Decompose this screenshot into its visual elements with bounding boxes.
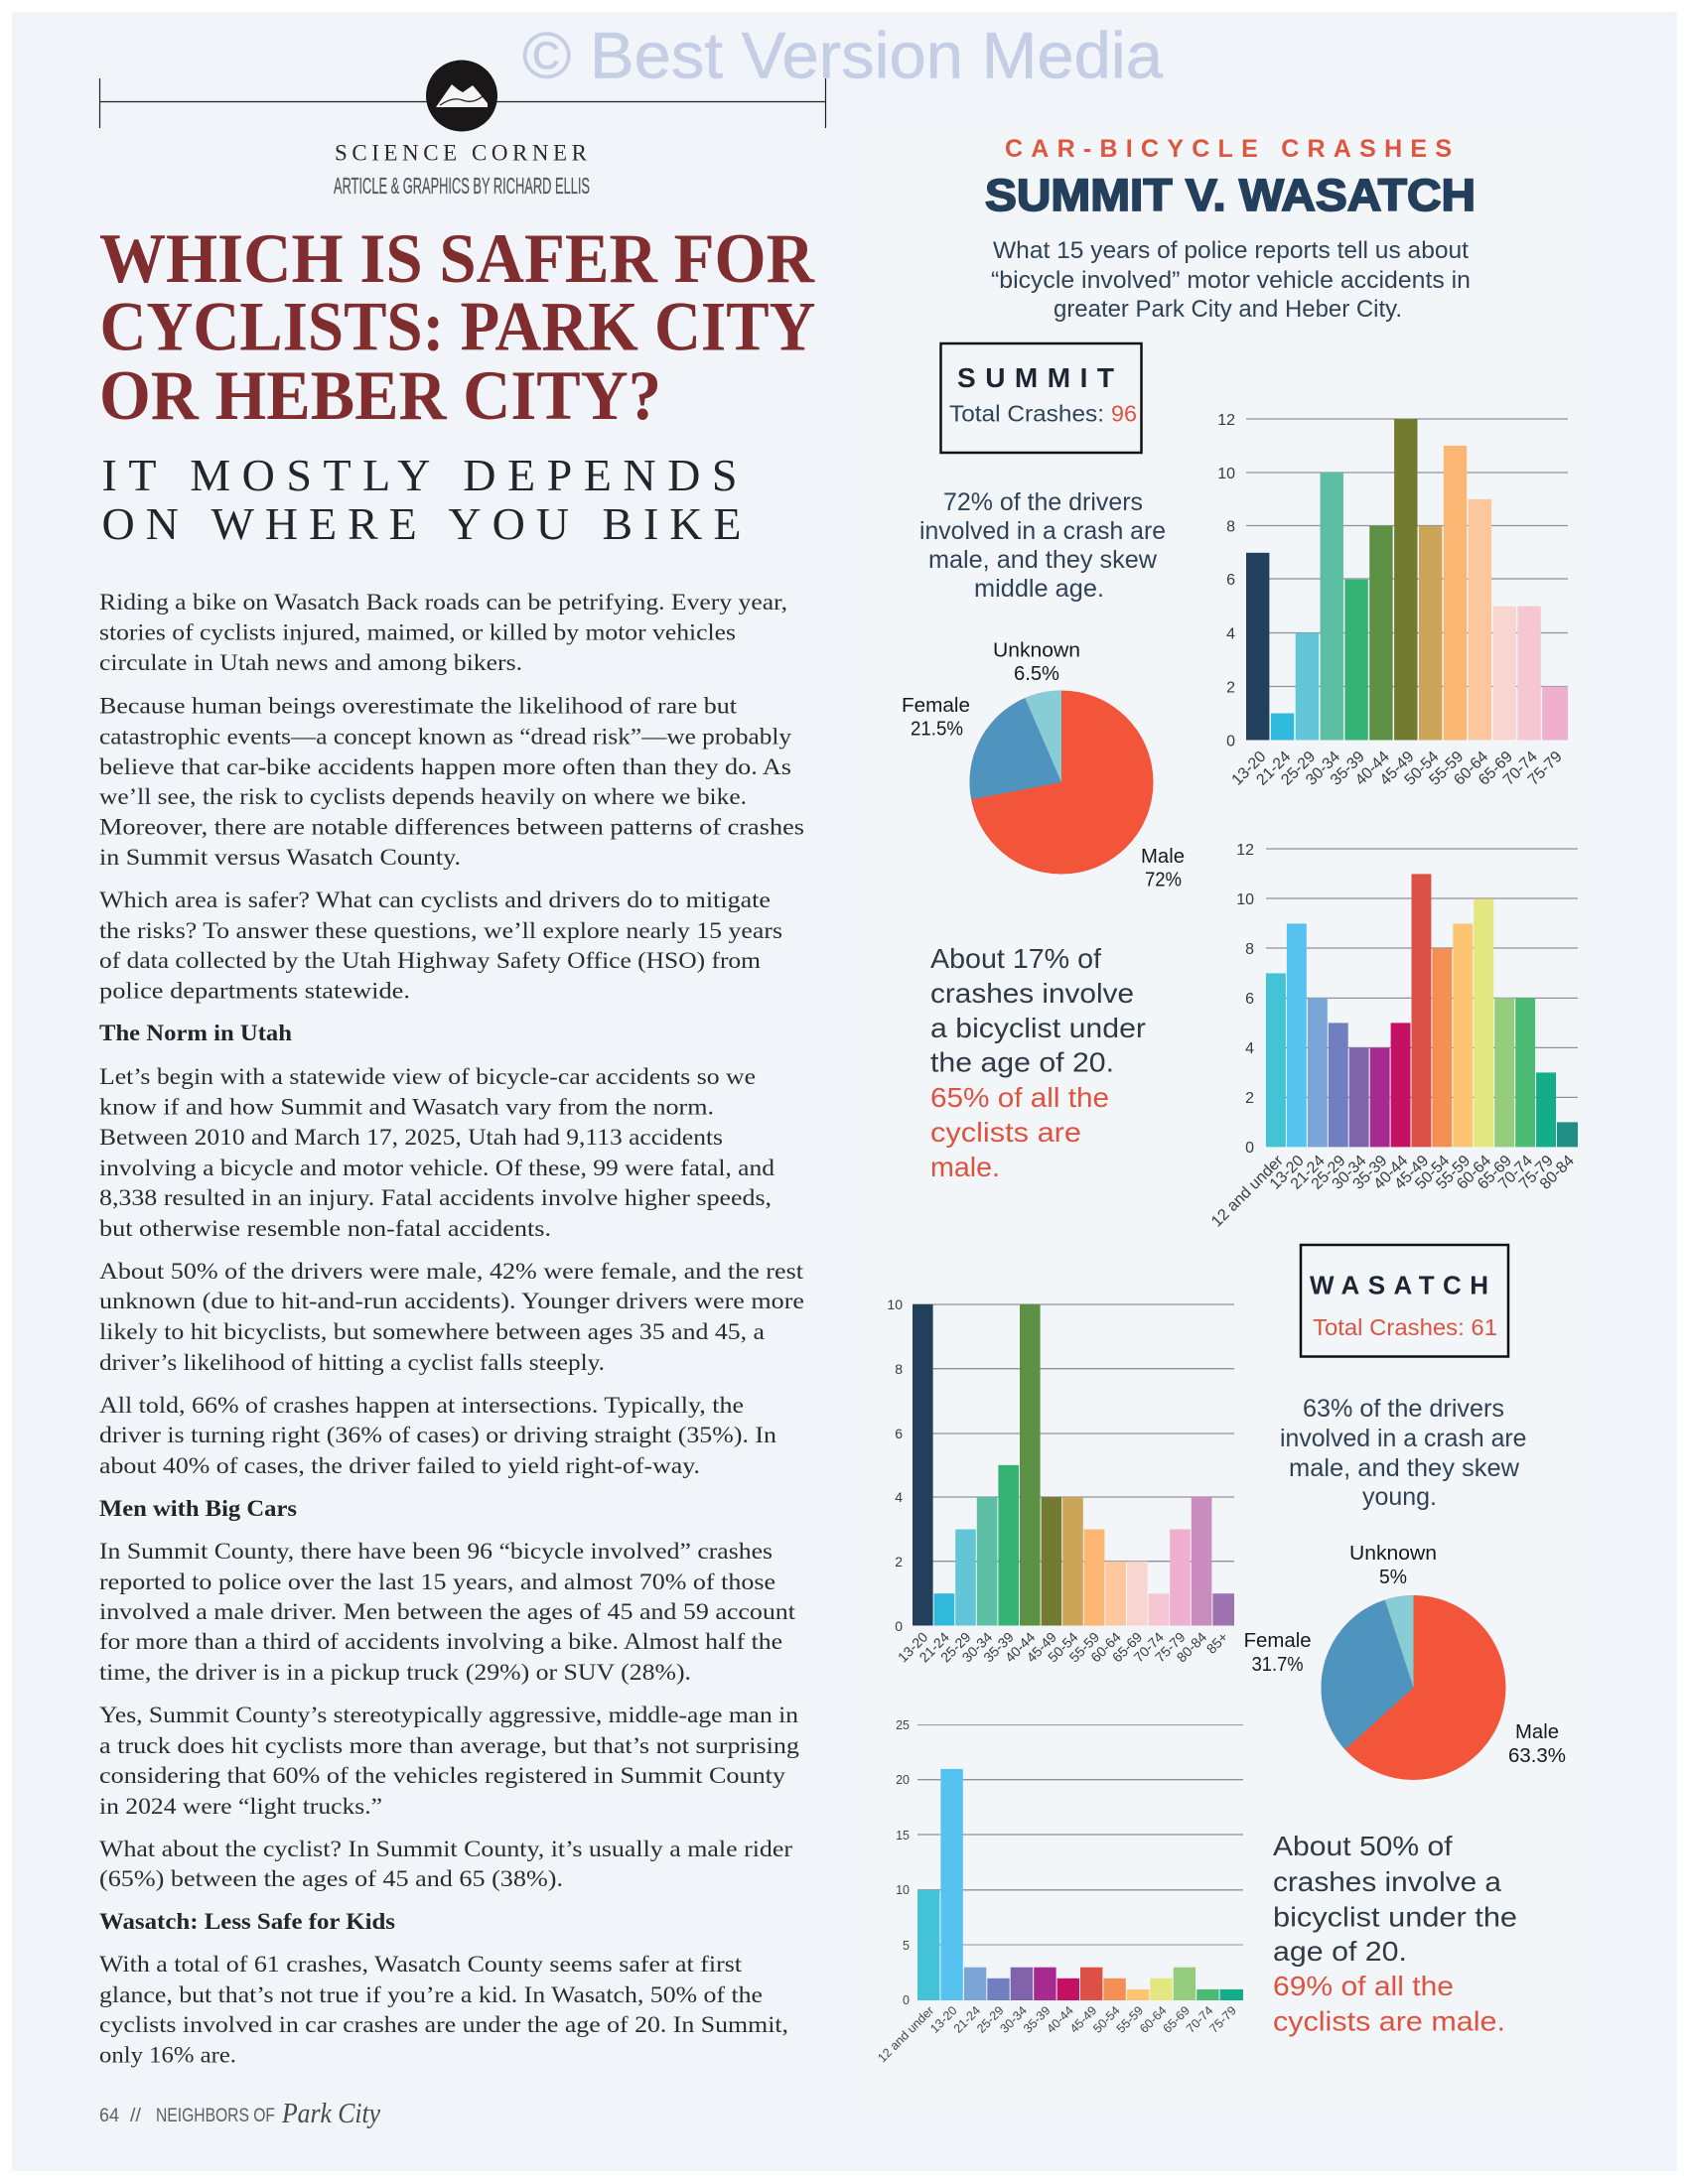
bar chart: summit drivers by age: 35-39 — [1328, 749, 1368, 789]
bar chart: wasatch cyclists by age: 35-39 — [1021, 2003, 1054, 2036]
article paragraph 7: In Summit County, there have been 96 “bicycle involved” crashes — [99, 1539, 773, 1564]
summit cyclist callout: About 17% of — [930, 943, 1101, 974]
bar chart: summit cyclists by age: 80-84 — [1537, 1153, 1578, 1193]
wasatch cyclist callout: bicyclist under the — [1273, 1902, 1517, 1932]
bar chart: summit drivers by age: 21-24 — [1253, 749, 1295, 789]
bar chart: summit cyclists by age: 8 — [1245, 941, 1254, 958]
summit driver text — [919, 488, 1166, 603]
infographic intro: “bicycle involved” motor vehicle accidents in — [991, 267, 1471, 294]
article paragraph 3: the risks? To answer these questions, we’ll explore nearly 15 years — [99, 918, 782, 943]
bar chart: wasatch cyclists by age: 12 and under — [875, 2003, 936, 2065]
heading: the norm in Utah: The Norm in Utah — [99, 1021, 292, 1045]
article paragraph 8: a truck does hit cyclists more than average, but that’s not surprising — [99, 1733, 800, 1758]
title: CYCLISTS: PARK CITY — [99, 288, 816, 365]
summit total box — [941, 343, 1142, 453]
article paragraph 9 — [99, 1837, 792, 1891]
bar chart: summit cyclists by age: 21-24 — [1288, 1153, 1329, 1193]
bar chart: wasatch drivers by age: 45-49 — [1023, 1629, 1059, 1665]
bar chart: wasatch drivers by age: 80-84 — [1174, 1629, 1209, 1665]
bar chart: wasatch drivers by age: 60-64 — [1087, 1629, 1124, 1665]
wasatch cyclist callout — [1273, 1831, 1517, 2037]
article paragraph 4: involving a bicycle and motor vehicle. Of these, 99 were fatal, and — [99, 1156, 775, 1180]
bar chart: wasatch cyclists by age: 45-49 — [1067, 2003, 1099, 2036]
article paragraph 8: Yes, Summit County’s stereotypically aggressive, middle-age man in — [99, 1703, 799, 1727]
pie chart: summit drivers by gender: Female — [902, 694, 970, 717]
article paragraph 8 — [99, 1703, 800, 1819]
bar chart: wasatch drivers by age: 4 — [895, 1489, 903, 1505]
article paragraph 10: With a total of 61 crashes, Wasatch County seems safer at first — [99, 1952, 743, 1977]
infographic intro: greater Park City and Heber City. — [1054, 296, 1402, 323]
article paragraph 7: reported to police over the last 15 years, and almost 70% of those — [99, 1570, 775, 1594]
bar chart: wasatch drivers by age: 6 — [895, 1426, 903, 1441]
bar chart: summit cyclists by age: 30-34 — [1330, 1153, 1370, 1193]
bar chart: wasatch cyclists by age: 30-34 — [998, 2003, 1030, 2036]
bar chart: summit drivers by age: 4 — [1226, 625, 1235, 643]
pie chart: summit drivers by gender: 72% — [1145, 868, 1182, 891]
bar chart: wasatch drivers by age: 25-29 — [937, 1629, 974, 1665]
bar chart: wasatch cyclists by age: 40-44 — [1044, 2003, 1076, 2036]
bar chart: wasatch drivers by age: 70-74 — [1130, 1629, 1167, 1665]
bar chart: summit drivers by age: 0 — [1226, 733, 1235, 751]
bar chart: wasatch drivers by age: 21-24 — [915, 1629, 952, 1665]
article paragraph 6: All told, 66% of crashes happen at intersections. Typically, the — [99, 1393, 744, 1418]
section header: rule with logo — [99, 60, 826, 131]
footer folio: // — [130, 2106, 142, 2126]
article paragraph 4: 8,338 resulted in an injury. Fatal accidents involve higher speeds, — [99, 1185, 772, 1210]
pie chart: summit drivers by gender: 6.5% — [1014, 662, 1059, 685]
pie chart: wasatch drivers by gender: Female — [1244, 1629, 1312, 1652]
bar chart: summit drivers by age: 75-79 — [1525, 749, 1566, 789]
article paragraph 3: police departments statewide. — [99, 979, 410, 1004]
bar chart: summit drivers by age: 55-59 — [1426, 749, 1467, 789]
bar chart: wasatch cyclists by age: 0 — [903, 1993, 910, 2007]
article paragraph 2: we’ll see, the risk to cyclists depends heavily on where we bike. — [99, 784, 747, 809]
subtitle: ON WHERE YOU BIKE — [101, 498, 741, 549]
bar chart: wasatch drivers by age: 35-39 — [980, 1629, 1017, 1665]
article paragraph 2: catastrophic events—a concept known as “dread risk”—we probably — [99, 724, 792, 749]
bar chart: summit cyclists by age: 10 — [1236, 891, 1254, 908]
bar chart: summit cyclists by age: 60-64 — [1454, 1153, 1494, 1193]
bar chart: summit cyclists by age: 6 — [1245, 991, 1254, 1008]
summit total box: SUMMIT — [957, 362, 1114, 393]
wasatch total box: WASATCH — [1310, 1271, 1488, 1300]
article paragraph 7: for more than a third of accidents involving a bike. Almost half the — [99, 1629, 782, 1654]
pie chart: summit drivers by gender — [902, 639, 1185, 891]
article paragraph 9: What about the cyclist? In Summit County, it’s usually a male rider — [99, 1837, 792, 1861]
wasatch total box — [1301, 1245, 1508, 1356]
article paragraph 5: driver’s likelihood of hitting a cyclist falls steeply. — [99, 1350, 605, 1375]
infographic title: SUMMIT V. WASATCH — [985, 170, 1476, 220]
wasatch cyclist callout: cyclists are male. — [1273, 2006, 1505, 2037]
pie chart: summit drivers by gender: 21.5% — [911, 718, 963, 741]
summit driver text: 72% of the drivers — [943, 488, 1143, 516]
bar chart: wasatch cyclists by age: 75-79 — [1206, 2003, 1239, 2036]
summit driver text: middle age. — [974, 575, 1104, 603]
title — [99, 220, 816, 435]
bar chart: summit drivers by age: 12 — [1217, 412, 1235, 429]
bar chart: summit drivers by age — [1217, 412, 1568, 789]
article paragraph 8: in 2024 were “light trucks.” — [99, 1794, 382, 1819]
article paragraph 2: Moreover, there are notable differences between patterns of crashes — [99, 815, 804, 840]
summit cyclist callout: 65% of all the — [930, 1082, 1109, 1113]
wasatch cyclist callout: 69% of all the — [1273, 1971, 1454, 2001]
bar chart: wasatch drivers by age: 13-20 — [895, 1629, 931, 1665]
label: science corner: SCIENCE CORNER — [335, 141, 588, 165]
article paragraph 6: driver is turning right (36% of cases) or driving straight (35%). In — [99, 1423, 777, 1447]
article paragraph 2: in Summit versus Wasatch County. — [99, 845, 461, 870]
bar chart: wasatch drivers by age — [887, 1297, 1234, 1665]
bar chart: summit cyclists by age: 65-69 — [1475, 1153, 1515, 1193]
bar chart: summit drivers by age: 6 — [1226, 572, 1235, 589]
article paragraph 4: Between 2010 and March 17, 2025, Utah had 9,113 accidents — [99, 1125, 723, 1150]
title: WHICH IS SAFER FOR — [99, 220, 815, 298]
bar chart: wasatch drivers by age: 50-54 — [1045, 1629, 1081, 1665]
pie chart: wasatch drivers by gender — [1244, 1542, 1566, 1780]
panel: infographic background — [860, 127, 1583, 2112]
bar chart: wasatch cyclists by age: 50-54 — [1090, 2003, 1123, 2036]
infographic intro: What 15 years of police reports tell us about — [993, 237, 1469, 264]
bar chart: summit drivers by age: 70-74 — [1500, 749, 1541, 789]
wasatch cyclist callout: age of 20. — [1273, 1936, 1407, 1967]
summit driver text: male, and they skew — [928, 546, 1158, 574]
wasatch driver text: 63% of the drivers — [1303, 1395, 1504, 1423]
wasatch cyclist callout: About 50% of — [1273, 1831, 1453, 1861]
bar chart: summit cyclists by age: 25-29 — [1309, 1153, 1349, 1193]
bar chart: wasatch cyclists by age: 55-59 — [1114, 2003, 1146, 2036]
article paragraph 6: about 40% of cases, the driver failed to yield right-of-way. — [99, 1453, 700, 1478]
pie chart: wasatch drivers by gender: 31.7% — [1252, 1653, 1304, 1676]
article paragraph 3 — [99, 887, 782, 1004]
bar chart: wasatch cyclists by age: 70-74 — [1184, 2003, 1216, 2036]
title: OR HEBER CITY? — [99, 357, 661, 435]
bar chart: summit cyclists by age: 13-20 — [1267, 1153, 1308, 1193]
bar chart: summit cyclists by age: 55-59 — [1433, 1153, 1474, 1193]
article paragraph 1 — [99, 590, 787, 675]
summit cyclist callout: the age of 20. — [930, 1047, 1114, 1078]
bar chart: summit cyclists by age: 2 — [1245, 1090, 1254, 1107]
bar chart: wasatch cyclists by age: 60-64 — [1137, 2003, 1170, 2036]
bar chart: summit drivers by age: 60-64 — [1451, 749, 1491, 789]
bar chart: wasatch cyclists by age: 20 — [896, 1773, 910, 1787]
pie chart: wasatch drivers by gender: Unknown — [1349, 1542, 1437, 1565]
bar chart: wasatch cyclists by age: 25 — [896, 1718, 910, 1732]
bar chart: wasatch drivers by age: 0 — [895, 1618, 903, 1634]
bar chart: wasatch cyclists by age: 21-24 — [951, 2003, 983, 2036]
wasatch driver text: involved in a crash are — [1280, 1425, 1527, 1452]
bar chart: summit drivers by age: 13-20 — [1229, 749, 1270, 789]
subtitle: IT MOSTLY DEPENDS — [101, 450, 737, 500]
article paragraph 2 — [99, 694, 804, 870]
subtitle — [101, 450, 741, 549]
bar chart: wasatch drivers by age: 2 — [895, 1554, 903, 1570]
pie chart: summit drivers by gender: Male — [1141, 845, 1185, 868]
summit cyclist callout: crashes involve — [930, 978, 1134, 1009]
article paragraph 5 — [99, 1259, 804, 1375]
bar chart: wasatch drivers by age: 85+ — [1203, 1629, 1231, 1657]
bar chart: summit cyclists by age: 35-39 — [1350, 1153, 1391, 1193]
bar chart: wasatch drivers by age: 8 — [895, 1361, 903, 1377]
wasatch driver text: young. — [1362, 1483, 1437, 1511]
bar chart: summit cyclists by age: 0 — [1245, 1140, 1254, 1157]
bar chart: wasatch cyclists by age: 15 — [896, 1829, 910, 1843]
summit cyclist callout — [930, 943, 1146, 1182]
bar chart: wasatch drivers by age: 75-79 — [1152, 1629, 1189, 1665]
bar chart: wasatch drivers by age: 40-44 — [1002, 1629, 1039, 1665]
article paragraph 4: know if and how Summit and Wasatch vary from the norm. — [99, 1095, 714, 1120]
bar chart: summit cyclists by age — [1208, 842, 1578, 1231]
byline: ARTICLE & GRAPHICS BY RICHARD ELLIS — [334, 173, 590, 199]
bar chart: summit cyclists by age: 12 — [1236, 842, 1254, 859]
bar chart: wasatch cyclists by age: 5 — [903, 1939, 910, 1953]
wasatch cyclist callout: crashes involve a — [1273, 1866, 1501, 1897]
bar chart: summit drivers by age: 45-49 — [1377, 749, 1418, 789]
article paragraph 5: unknown (due to hit-and-run accidents). Younger drivers were more — [99, 1289, 804, 1313]
footer folio: 64 — [99, 2106, 119, 2126]
footer folio: Park City — [281, 2098, 380, 2129]
article paragraph 1: Riding a bike on Wasatch Back roads can be petrifying. Every year, — [99, 590, 787, 614]
bar chart: wasatch cyclists by age: 10 — [896, 1883, 910, 1897]
article paragraph 5: About 50% of the drivers were male, 42% were female, and the rest — [99, 1259, 804, 1284]
infographic kicker: CAR-BICYCLE CRASHES — [1005, 135, 1452, 163]
bar chart: wasatch drivers by age: 65-69 — [1109, 1629, 1146, 1665]
article paragraph 4: but otherwise resemble non-fatal accidents. — [99, 1216, 551, 1241]
watermark: © Best Version Media — [522, 18, 1163, 91]
article paragraph 8: considering that 60% of the vehicles registered in Summit County — [99, 1763, 786, 1788]
article paragraph 2: Because human beings overestimate the likelihood of rare but — [99, 694, 738, 719]
pie chart: wasatch drivers by gender: 63.3% — [1508, 1744, 1566, 1767]
wasatch driver text: male, and they skew — [1289, 1454, 1520, 1482]
article paragraph 10 — [99, 1952, 788, 2067]
article paragraph 1: circulate in Utah news and among bikers. — [99, 650, 522, 675]
heading: men with big cars: Men with Big Cars — [99, 1496, 297, 1521]
article paragraph 3: Which area is safer? What can cyclists and drivers do to mitigate — [99, 887, 771, 912]
article paragraph 3: of data collected by the Utah Highway Safety Office (HSO) from — [99, 948, 761, 973]
article paragraph 5: likely to hit bicyclists, but somewhere between ages 35 and 45, a — [99, 1319, 765, 1344]
article paragraph 7: involved a male driver. Men between the ages of 45 and 59 account — [99, 1599, 796, 1624]
bar chart: wasatch drivers by age: 10 — [887, 1297, 903, 1312]
bar chart: wasatch drivers by age: 55-59 — [1066, 1629, 1102, 1665]
article paragraph 7: time, the driver is in a pickup truck (29%) or SUV (28%). — [99, 1660, 691, 1685]
pie chart: wasatch drivers by gender: 5% — [1379, 1566, 1407, 1588]
article paragraph 2: believe that car-bike accidents happen more often than they do. As — [99, 754, 791, 779]
pie chart: summit drivers by gender: Unknown — [993, 639, 1080, 662]
bar chart: wasatch cyclists by age: 25-29 — [974, 2003, 1007, 2036]
bar chart: summit cyclists by age: 40-44 — [1370, 1153, 1412, 1193]
summit cyclist callout: male. — [930, 1152, 1000, 1182]
bar chart: summit drivers by age: 40-44 — [1352, 749, 1393, 789]
bar chart: wasatch cyclists by age: 65-69 — [1161, 2003, 1193, 2036]
bar chart: wasatch cyclists by age: 13-20 — [927, 2003, 960, 2036]
bar chart: summit drivers by age: 65-69 — [1476, 749, 1516, 789]
summit cyclist callout: cyclists are — [930, 1117, 1081, 1148]
wasatch total box: Total Crashes: 61 — [1313, 1314, 1497, 1340]
bar chart: summit cyclists by age: 75-79 — [1516, 1153, 1557, 1193]
article paragraph 7 — [99, 1539, 796, 1685]
article paragraph 10: only 16% are. — [99, 2043, 236, 2067]
bar chart: wasatch drivers by age: 30-34 — [959, 1629, 995, 1665]
article paragraph 4: Let’s begin with a statewide view of bicycle-car accidents so we — [99, 1064, 756, 1089]
summit cyclist callout: a bicyclist under — [930, 1013, 1146, 1043]
footer folio — [99, 2098, 380, 2129]
summit total box: Total Crashes: — [949, 401, 1104, 427]
article paragraph 9: (65%) between the ages of 45 and 65 (38%). — [99, 1866, 563, 1891]
article paragraph 1: stories of cyclists injured, maimed, or killed by motor vehicles — [99, 620, 736, 645]
bar chart: wasatch cyclists by age — [875, 1718, 1243, 2065]
bar chart: summit drivers by age: 30-34 — [1303, 749, 1343, 789]
footer folio: NEIGHBORS OF — [156, 2106, 275, 2126]
bar chart: summit cyclists by age: 12 and under — [1208, 1152, 1287, 1231]
summit driver text: involved in a crash are — [919, 517, 1166, 545]
article paragraph 6 — [99, 1393, 777, 1478]
article paragraph 10: glance, but that’s not true if you’re a kid. In Wasatch, 50% of the — [99, 1982, 763, 2007]
summit total box: 96 — [1111, 401, 1137, 427]
bar chart: summit drivers by age: 2 — [1226, 679, 1235, 697]
pie chart: wasatch drivers by gender: Male — [1515, 1720, 1559, 1743]
infographic intro — [991, 237, 1471, 323]
bar chart: summit drivers by age: 50-54 — [1402, 749, 1443, 789]
bar chart: summit drivers by age: 25-29 — [1278, 749, 1319, 789]
bar chart: summit cyclists by age: 70-74 — [1495, 1153, 1536, 1193]
wasatch driver text — [1280, 1395, 1527, 1511]
heading: Wasatch less safe for kids: Wasatch: Less Safe for Kids — [99, 1909, 395, 1934]
article paragraph 4 — [99, 1064, 775, 1241]
bar chart: summit cyclists by age: 4 — [1245, 1040, 1254, 1057]
bar chart: summit drivers by age: 8 — [1226, 518, 1235, 536]
bar chart: summit cyclists by age: 50-54 — [1412, 1153, 1453, 1193]
article paragraph 10: cyclists involved in car crashes are under the age of 20. In Summit, — [99, 2012, 788, 2037]
bar chart: summit drivers by age: 10 — [1217, 466, 1235, 482]
bar chart: summit cyclists by age: 45-49 — [1391, 1153, 1432, 1193]
